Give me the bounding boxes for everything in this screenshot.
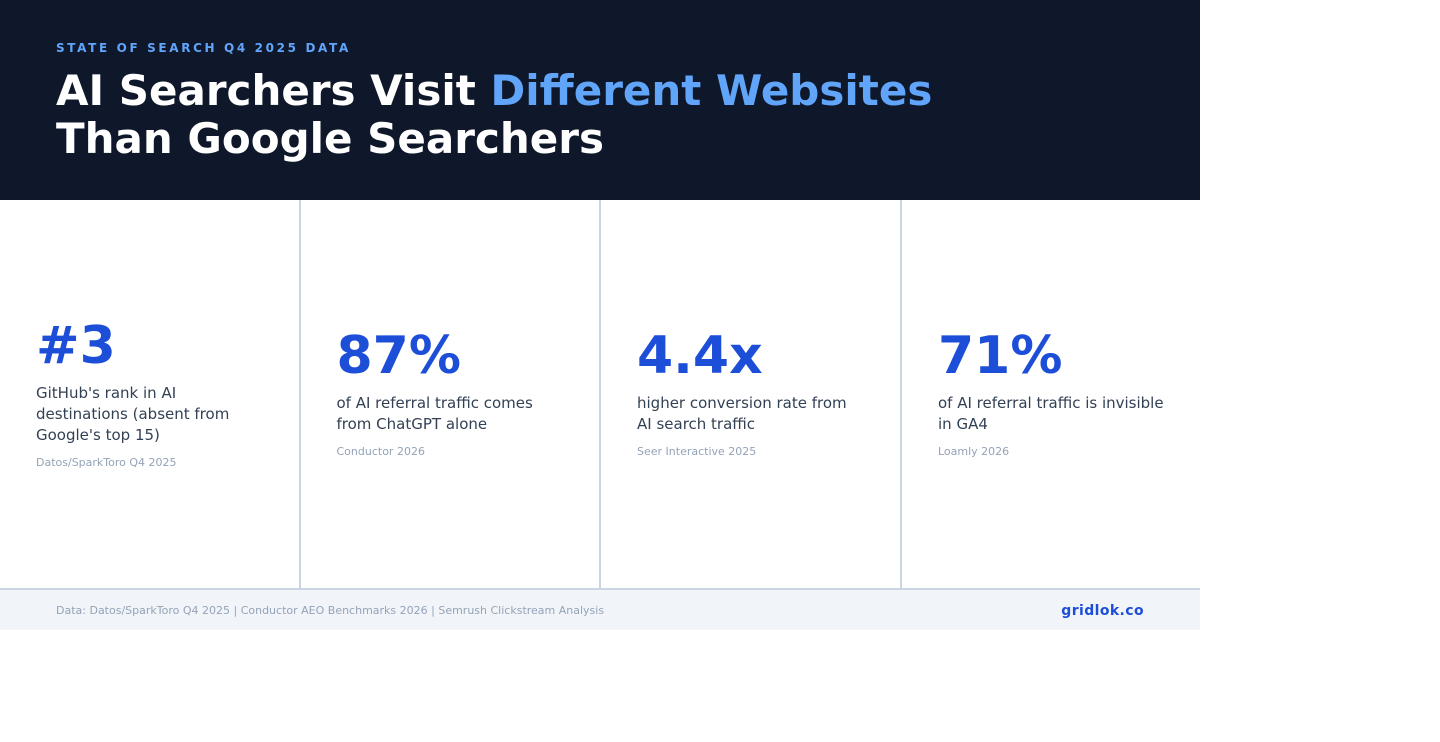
header panel <box>0 0 1200 200</box>
eyebrow label: STATE OF SEARCH Q4 2025 DATA <box>56 41 351 55</box>
stat description: destinations (absent from <box>36 405 229 423</box>
stat description <box>637 394 847 433</box>
stat source: Conductor 2026 <box>336 445 425 458</box>
stat description: from ChatGPT alone <box>336 415 487 433</box>
title <box>56 66 932 163</box>
infographic <box>0 0 1200 630</box>
stat description <box>938 394 1164 433</box>
stats row <box>36 200 1164 588</box>
stat description: GitHub's rank in AI <box>36 384 176 402</box>
stat description: of AI referral traffic is invisible <box>938 394 1164 412</box>
stat description: Google's top 15) <box>36 426 160 444</box>
stat description: higher conversion rate from <box>637 394 847 412</box>
stat number: 71% <box>938 326 1062 386</box>
stat description: in GA4 <box>938 415 988 433</box>
stat number: #3 <box>36 316 116 376</box>
stat number: 87% <box>336 326 461 386</box>
stat number: 4.4x <box>637 326 763 386</box>
panel: GitHub rank <box>0 200 301 588</box>
title: AI Searchers Visit Different Websites <box>56 66 932 115</box>
stat description <box>36 384 229 444</box>
panel: ChatGPT share <box>301 200 601 588</box>
stat source: Loamly 2026 <box>938 445 1009 458</box>
stat description <box>336 394 533 433</box>
data sources: Data: Datos/SparkToro Q4 2025 | Conductor AEO Benchmarks 2026 | Semrush Clickstream Analysis <box>56 604 604 617</box>
stat source: Datos/SparkToro Q4 2025 <box>36 456 177 469</box>
panel: conversion rate <box>601 200 902 588</box>
stat description: of AI referral traffic comes <box>336 394 533 412</box>
brand: gridlok.co <box>1061 603 1144 619</box>
title: Than Google Searchers <box>56 114 604 163</box>
stat source: Seer Interactive 2025 <box>637 445 756 458</box>
stat description: AI search traffic <box>637 415 755 433</box>
panel: invisible traffic <box>938 326 1164 458</box>
footer bar <box>0 588 1200 630</box>
